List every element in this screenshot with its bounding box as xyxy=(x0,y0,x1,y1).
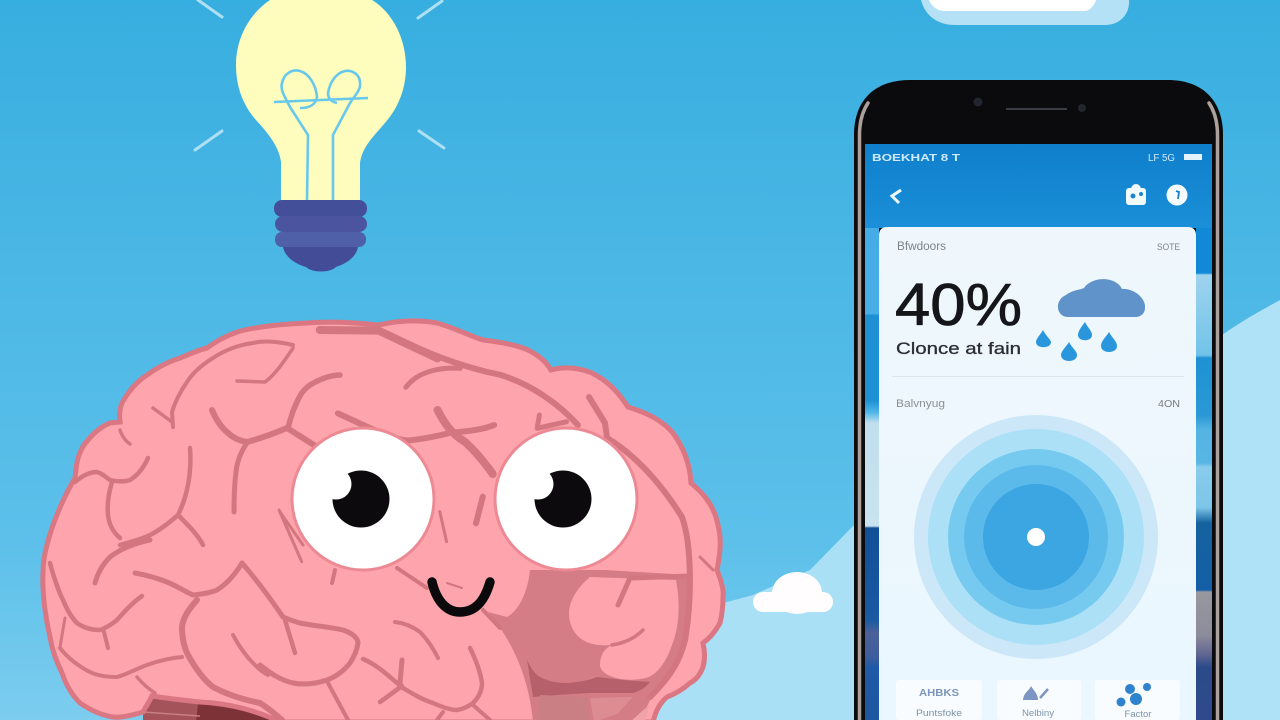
bulb glass xyxy=(236,0,406,200)
background hills xyxy=(600,300,1280,720)
bottom tile: left: Puntsfoke xyxy=(916,708,962,719)
brain folds: upper and centre xyxy=(279,330,578,562)
brain shaded underside xyxy=(488,570,690,720)
card label: Bfwdoors xyxy=(897,241,946,253)
radar chart xyxy=(914,415,1158,659)
phone metal edge xyxy=(860,103,1218,720)
rain caption: Clonce at fain xyxy=(896,340,1021,358)
bottom tile: right: Factor xyxy=(1125,709,1151,720)
weather card: 4ON xyxy=(1158,398,1180,410)
light bulb xyxy=(236,0,406,272)
bottom tile: centre: Nelbiny xyxy=(1022,708,1054,719)
screen side strips xyxy=(865,220,1212,720)
bottom tile: left xyxy=(896,680,982,720)
weather card xyxy=(879,227,1196,720)
icon: rain cloud xyxy=(1036,279,1145,361)
brain stem xyxy=(143,696,283,720)
smile xyxy=(432,582,490,612)
back icon xyxy=(892,190,901,203)
status bar: LF 5G xyxy=(1148,153,1175,164)
cloud: top xyxy=(921,0,1129,25)
status bar: BOEKHAT 8 T xyxy=(872,152,961,164)
filament xyxy=(274,70,368,200)
radar label: Balvnyug xyxy=(896,398,945,410)
brain folds: right side xyxy=(589,397,690,697)
cloud: small white xyxy=(753,572,833,614)
weather card: SOTE xyxy=(1157,242,1180,253)
divider xyxy=(892,376,1184,377)
settings icon xyxy=(1126,184,1146,205)
rain percentage: 40% xyxy=(895,272,1022,338)
brain body xyxy=(43,321,723,720)
bottom tile: left: AHBKS xyxy=(919,688,959,699)
screw base xyxy=(274,200,367,272)
camera and speaker xyxy=(974,98,1086,112)
smartphone xyxy=(854,80,1223,720)
brain right lobes xyxy=(569,577,679,680)
bottom tile: centre xyxy=(997,680,1081,720)
left eye xyxy=(292,428,434,570)
info icon xyxy=(1166,184,1188,206)
light rays xyxy=(195,0,444,150)
right eye xyxy=(495,428,637,570)
bottom tile: right xyxy=(1095,680,1180,720)
status bar xyxy=(872,152,1202,164)
brain mascot xyxy=(43,321,723,720)
phone body xyxy=(854,80,1223,720)
app header xyxy=(865,144,1212,228)
brain folds: left and lower xyxy=(50,342,713,720)
